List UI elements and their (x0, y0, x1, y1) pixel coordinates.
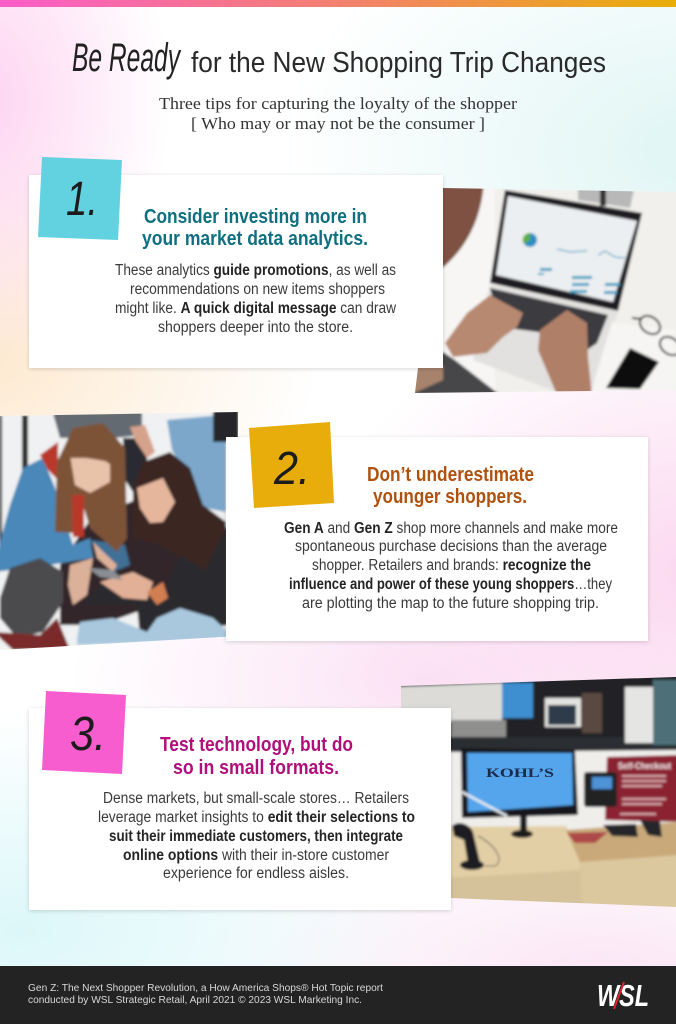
body text 1: shoppers deeper into the store. (158, 319, 353, 336)
footer bar (0, 966, 676, 1024)
panel: tip 3 card (29, 691, 451, 910)
pants left (0, 558, 63, 638)
heading 1: your market data analytics. (142, 228, 368, 250)
heading 2: younger shoppers. (373, 486, 527, 508)
body text 3: experience for endless aisles. (163, 865, 349, 882)
title (72, 36, 606, 80)
photo: two young shoppers with phone (0, 405, 245, 655)
body text 3: leverage market insights to edit their selections to (98, 809, 415, 826)
WSL logo: WSL (597, 978, 649, 1013)
KOHL'S screen logo: KOHL’S (486, 765, 554, 780)
laptop base (473, 285, 618, 395)
glasses (632, 312, 676, 359)
footer citation: conducted by WSL Strategic Retail, April 2021 © 2023 WSL Marketing Inc. (28, 994, 362, 1006)
heading 1 (142, 206, 368, 250)
hands (445, 295, 523, 357)
footer citation (28, 982, 383, 1006)
panel: tip 2 card (226, 422, 648, 641)
body text 2: influence and power of these young shoppers…they (289, 576, 612, 593)
jacket right (126, 526, 226, 634)
top gradient bar (0, 0, 676, 7)
body text 3: suit their immediate customers, then integrate (109, 828, 403, 845)
sticky note 1 (38, 157, 122, 240)
body text 2 (284, 520, 618, 612)
photo: self-checkout kiosk (395, 670, 676, 915)
sticky note 2 (249, 422, 334, 508)
title main words: for the New Shopping Trip Changes (191, 47, 606, 79)
jeans (77, 608, 228, 645)
hair left (55, 423, 127, 552)
heading 3: so in small formats. (173, 757, 339, 779)
body text 3: online options with their in-store customer (123, 847, 389, 864)
sticky note 2: 2. (273, 442, 310, 494)
body text 2: spontaneous purchase decisions than the average (295, 538, 607, 555)
body text 2: Gen A and Gen Z shop more channels and make more (284, 520, 618, 537)
heading 2: Don’t underestimate (367, 464, 534, 486)
scanner (452, 823, 480, 864)
subtitle (159, 94, 517, 133)
sleeve (410, 352, 500, 395)
card reader (584, 772, 617, 807)
self-checkout sign (605, 755, 676, 822)
panel: tip 1 card (29, 157, 443, 368)
dark area between the girls (60, 500, 185, 625)
body text 3 (98, 790, 415, 882)
heading 1: Consider investing more in (144, 206, 367, 228)
body text 3: Dense markets, but small-scale stores… Retailers (103, 790, 409, 807)
face left (70, 455, 110, 493)
body text 1 (115, 262, 397, 336)
hand and phone (100, 572, 153, 600)
phone (606, 348, 659, 389)
body text 2: are plotting the map to the future shopping trip. (302, 595, 599, 612)
girl left jacket (0, 458, 93, 572)
girl right: hair (133, 452, 226, 585)
body text 2: shopper. Retailers and brands: recognize the (312, 557, 591, 574)
sticky note 3: 3. (70, 708, 106, 761)
monitor (461, 748, 578, 818)
counter wall (445, 750, 676, 830)
sticky note 3 (42, 691, 126, 774)
heading 3 (160, 734, 353, 779)
footer citation: Gen Z: The Next Shopper Revolution, a How America Shops® Hot Topic report (28, 982, 383, 994)
standing people (52, 410, 142, 438)
photo: laptop analytics (415, 188, 676, 393)
title script words: Be Ready (72, 36, 182, 80)
body text 1: recommendations on new items shoppers (130, 281, 385, 298)
subtitle: [ Who may or may not be the consumer ] (191, 114, 485, 133)
heading 3: Test technology, but do (160, 734, 353, 756)
face right (137, 478, 175, 523)
screen (490, 190, 642, 311)
counter wood (445, 826, 584, 880)
body text 1: might like. A quick digital message can draw (115, 300, 397, 317)
body text 1: These analytics guide promotions, as well as (115, 262, 396, 279)
sticky note 1: 1. (66, 173, 98, 226)
heading 2 (367, 464, 534, 508)
subtitle: Three tips for capturing the loyalty of the shopper (159, 94, 517, 113)
